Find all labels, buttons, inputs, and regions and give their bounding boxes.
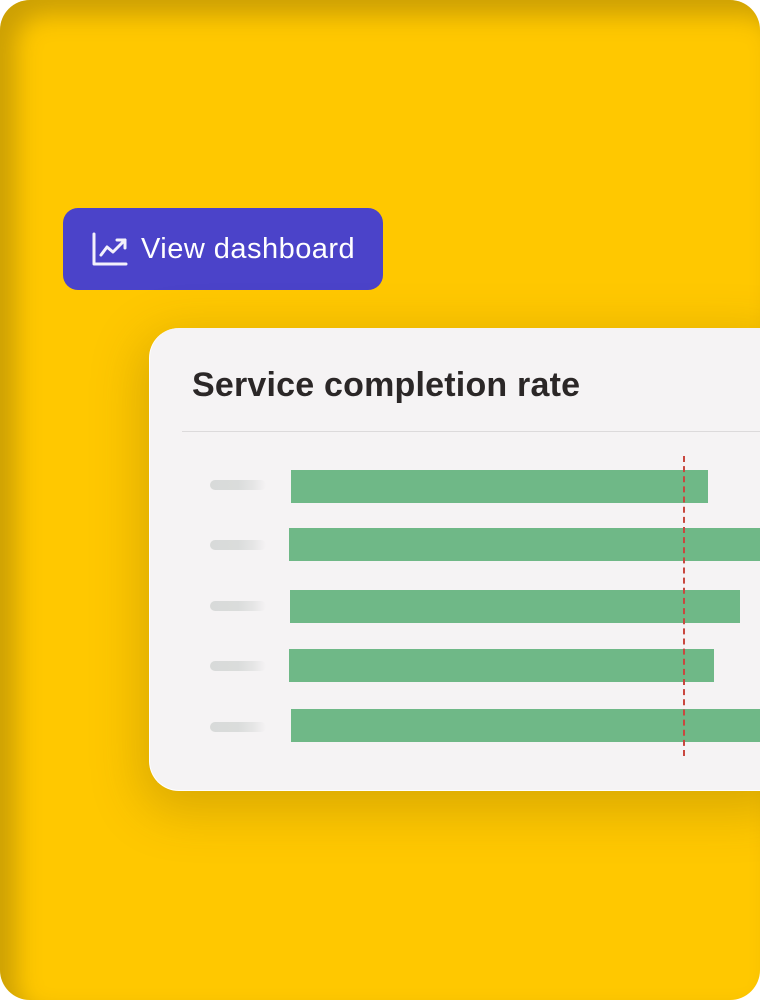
button label: View dashboard: [141, 233, 355, 265]
bar 4: [289, 649, 714, 682]
icon: line chart: [92, 232, 128, 266]
panel: service completion rate card: [149, 328, 760, 791]
bar 2: [289, 528, 760, 561]
heading: Service completion rate: [192, 366, 580, 404]
target line: [683, 456, 685, 756]
button: view dashboard: [63, 208, 383, 290]
bar 5: [291, 709, 760, 742]
bar 1: [291, 470, 708, 503]
bar 3: [290, 590, 740, 623]
row label 2: [210, 540, 266, 550]
row label 5: [210, 722, 266, 732]
row label 4: [210, 661, 266, 671]
row label 1: [210, 480, 266, 490]
row label 3: [210, 601, 266, 611]
